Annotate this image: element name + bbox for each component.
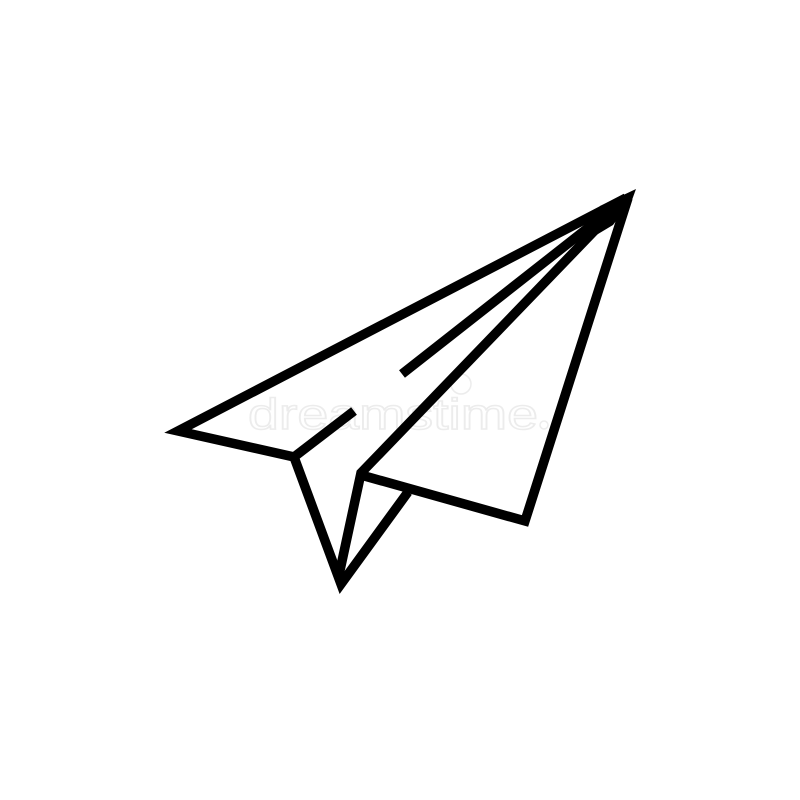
- watermark: dreamstime: [248, 390, 538, 439]
- paper plane outline: [178, 198, 628, 584]
- plane nose tip: [582, 189, 636, 243]
- watermark: [248, 374, 548, 439]
